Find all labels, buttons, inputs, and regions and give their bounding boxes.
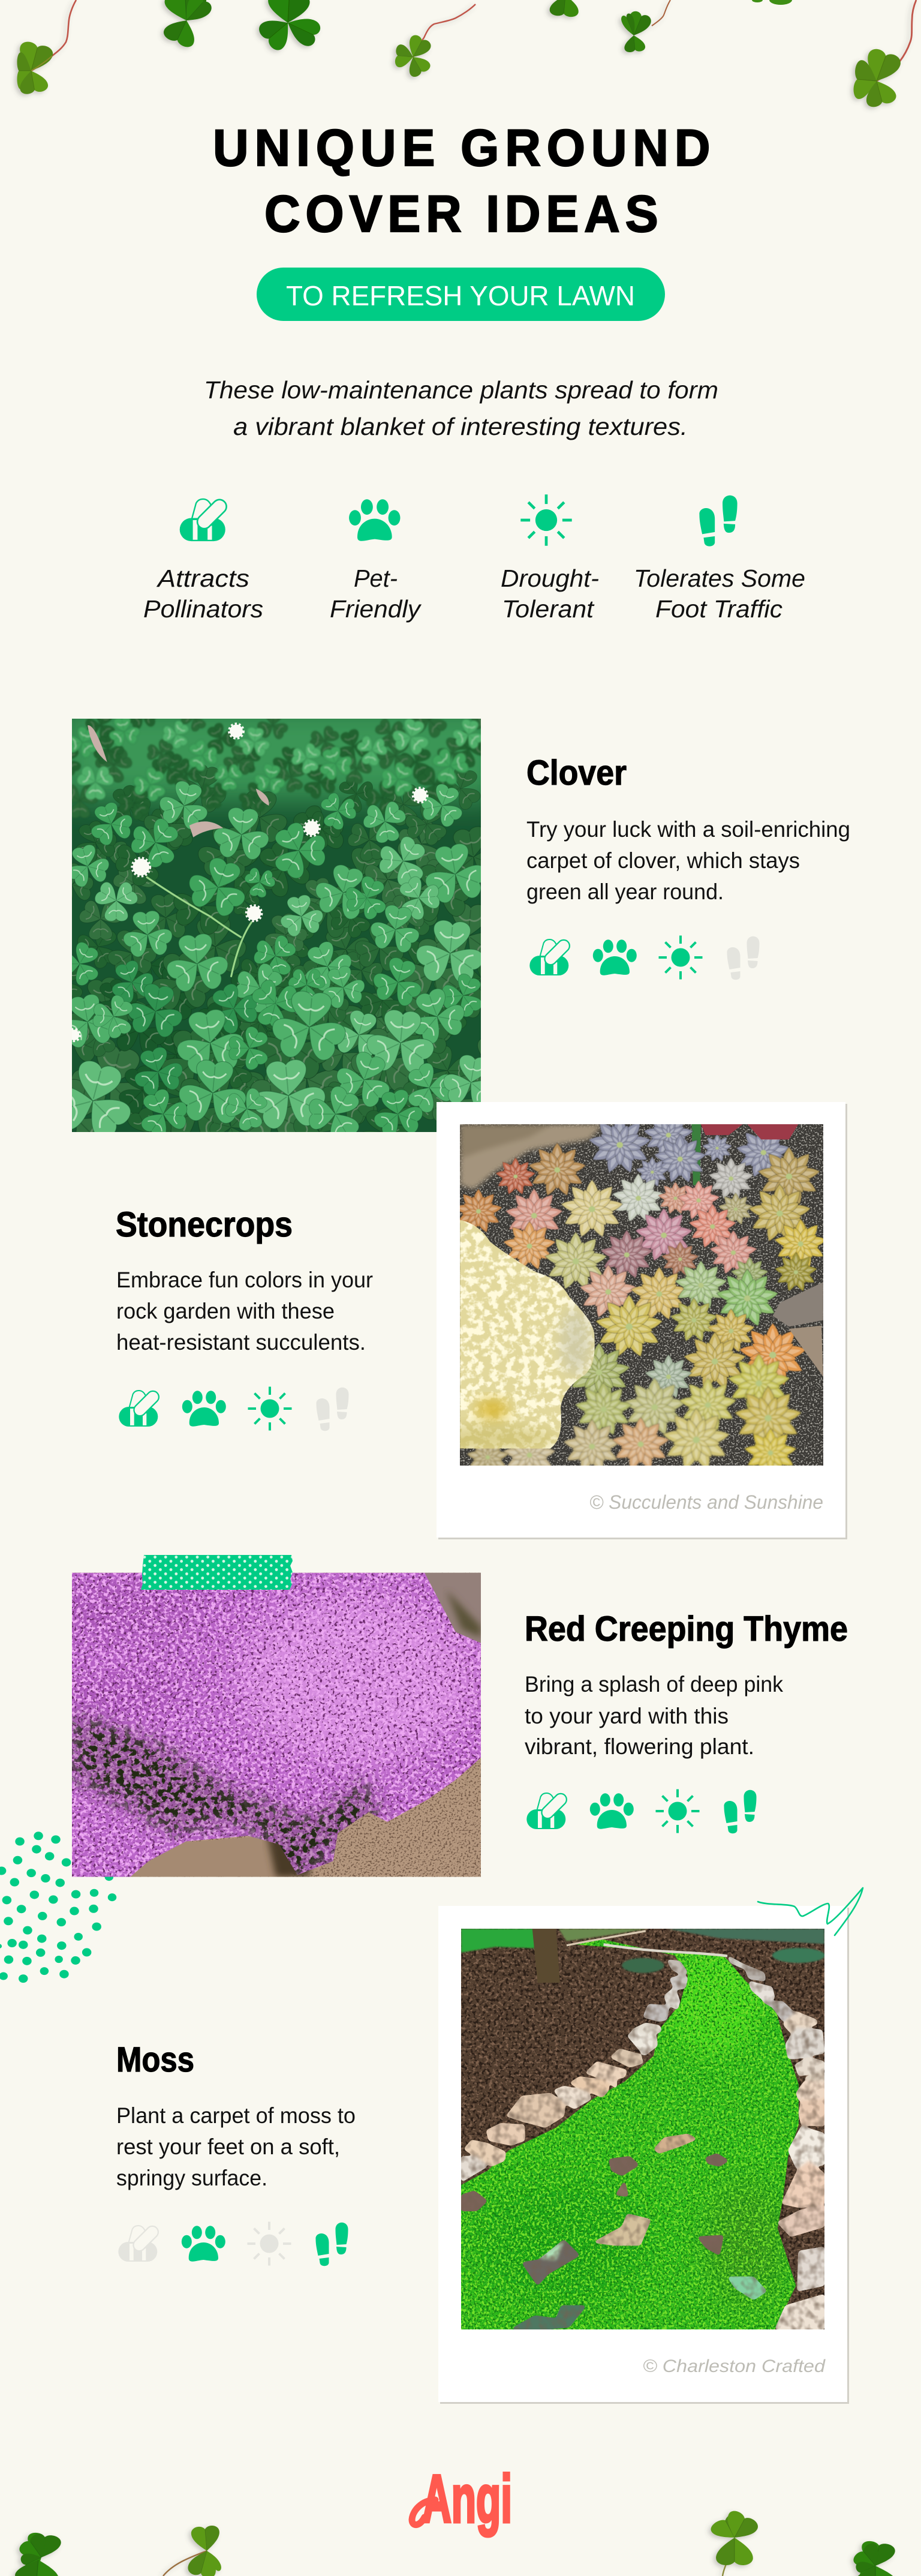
block: moss text: springy surface. (116, 2166, 267, 2190)
intro text: a vibrant blanket of interesting textures. (233, 413, 688, 440)
decorative squiggle (758, 1888, 863, 1935)
photo detail: fallen leaves (461, 2134, 767, 2329)
legend (143, 494, 805, 623)
clover sprig: top edge partial (752, 0, 792, 5)
clover sprig: top partial (549, 0, 580, 17)
photo detail: pale limestone boulder (460, 1220, 595, 1449)
clover sprig: bottom far right (851, 2540, 897, 2576)
icons: clover (529, 936, 759, 980)
bottom clover decorations (14, 2508, 897, 2576)
block: red creeping thyme text: to your yard with this (525, 1704, 729, 1728)
washi tape (141, 1555, 293, 1590)
block: stonecrops text: heat-resistant succulents. (116, 1330, 366, 1355)
photo detail: dark foliage patches (72, 1704, 393, 1875)
clover sprig: right middle (620, 0, 670, 53)
block: clover text: green all year round. (526, 879, 724, 904)
subtitle pill: TO REFRESH YOUR LAWN (286, 280, 635, 311)
photo detail: blue-gray rosettes (588, 1112, 791, 1200)
block: moss text (116, 2040, 356, 2190)
top clover decorations (15, 0, 916, 109)
block: stonecrops text: rock garden with these (116, 1299, 335, 1323)
legend: pet-friendly: Pet- (354, 565, 398, 592)
photo: stonecrops (460, 1124, 823, 1466)
photo detail: gray rocks (773, 1282, 823, 1326)
block: moss text: Moss (116, 2040, 194, 2079)
intro text: These low-maintenance plants spread to form (204, 376, 718, 404)
legend: drought-tolerant (501, 494, 599, 623)
clover sprig: center (395, 4, 475, 79)
block: red creeping thyme text (525, 1610, 848, 1759)
block: stonecrops text (116, 1205, 373, 1355)
photo detail: edging stones (461, 1956, 824, 2329)
block: clover text: carpet of clover, which stays (526, 848, 800, 873)
card: stonecrops photo (418, 1102, 847, 1539)
clover sprig: bottom right (709, 2508, 760, 2576)
photo: red creeping thyme (72, 1573, 481, 1877)
legend: pet-friendly: Friendly (330, 595, 422, 623)
legend: pet-friendly (330, 499, 422, 623)
block: moss text: rest your feet on a soft, (116, 2134, 340, 2159)
photo detail: stems (146, 877, 252, 977)
block: red creeping thyme text: Red Creeping Thyme (525, 1610, 848, 1649)
photo detail: moss path (461, 1929, 824, 2329)
photo: moss (461, 1929, 824, 2329)
block: clover text: Clover (526, 753, 627, 792)
photo detail: white flowers (69, 725, 427, 1040)
block: clover text: Try your luck with a soil-enriching (526, 817, 850, 842)
photo detail: colourful succulent rosettes (454, 1143, 827, 1402)
legend: tolerates some foot traffic (634, 496, 805, 623)
legend: tolerates some foot traffic: Tolerates Some (634, 565, 805, 592)
legend: attracts pollinators: Attracts (156, 565, 249, 592)
legend: drought-tolerant: Drought- (501, 565, 599, 592)
card: moss photo (438, 1906, 849, 2404)
clover sprig: upper middle (256, 0, 323, 53)
block: stonecrops text: Stonecrops (116, 1205, 293, 1244)
legend: tolerates some foot traffic: Foot Traffic (655, 595, 783, 623)
dot pattern (0, 1832, 116, 1983)
subtitle pill (257, 268, 665, 321)
photo credit: © Succulents and Sunshine (589, 1491, 823, 1513)
clover sprig: far left (15, 0, 76, 95)
title (213, 119, 710, 242)
clover sprig: bottom left (163, 2525, 223, 2576)
block: moss text: Plant a carpet of moss to (116, 2103, 356, 2128)
icons: stonecrops (119, 1387, 349, 1431)
title: COVER IDEAS (264, 185, 658, 242)
legend: attracts pollinators (143, 499, 263, 623)
icons: red creeping thyme (526, 1789, 757, 1833)
clover sprig: far right (853, 0, 916, 109)
icons: moss (118, 2222, 348, 2266)
block: red creeping thyme text: vibrant, flowering plant. (525, 1734, 754, 1759)
legend: attracts pollinators: Pollinators (143, 595, 263, 623)
legend: drought-tolerant: Tolerant (502, 595, 595, 623)
Angi logo: Angi (422, 2461, 512, 2536)
clover sprig: upper left middle (161, 0, 214, 50)
photo detail: dead leaves (88, 725, 269, 837)
photo detail: tree trunk (532, 1929, 560, 1983)
block: stonecrops text: Embrace fun colors in your (116, 1268, 373, 1292)
Angi logo (412, 2461, 512, 2536)
title: UNIQUE GROUND (213, 119, 710, 176)
intro text (204, 376, 718, 440)
photo: clover (72, 719, 481, 1132)
block: clover text (526, 753, 850, 904)
clover sprig: bottom far left (14, 2531, 62, 2576)
block: red creeping thyme text: Bring a splash of deep pink (525, 1672, 783, 1697)
photo credit: © Charleston Crafted (643, 2356, 826, 2376)
